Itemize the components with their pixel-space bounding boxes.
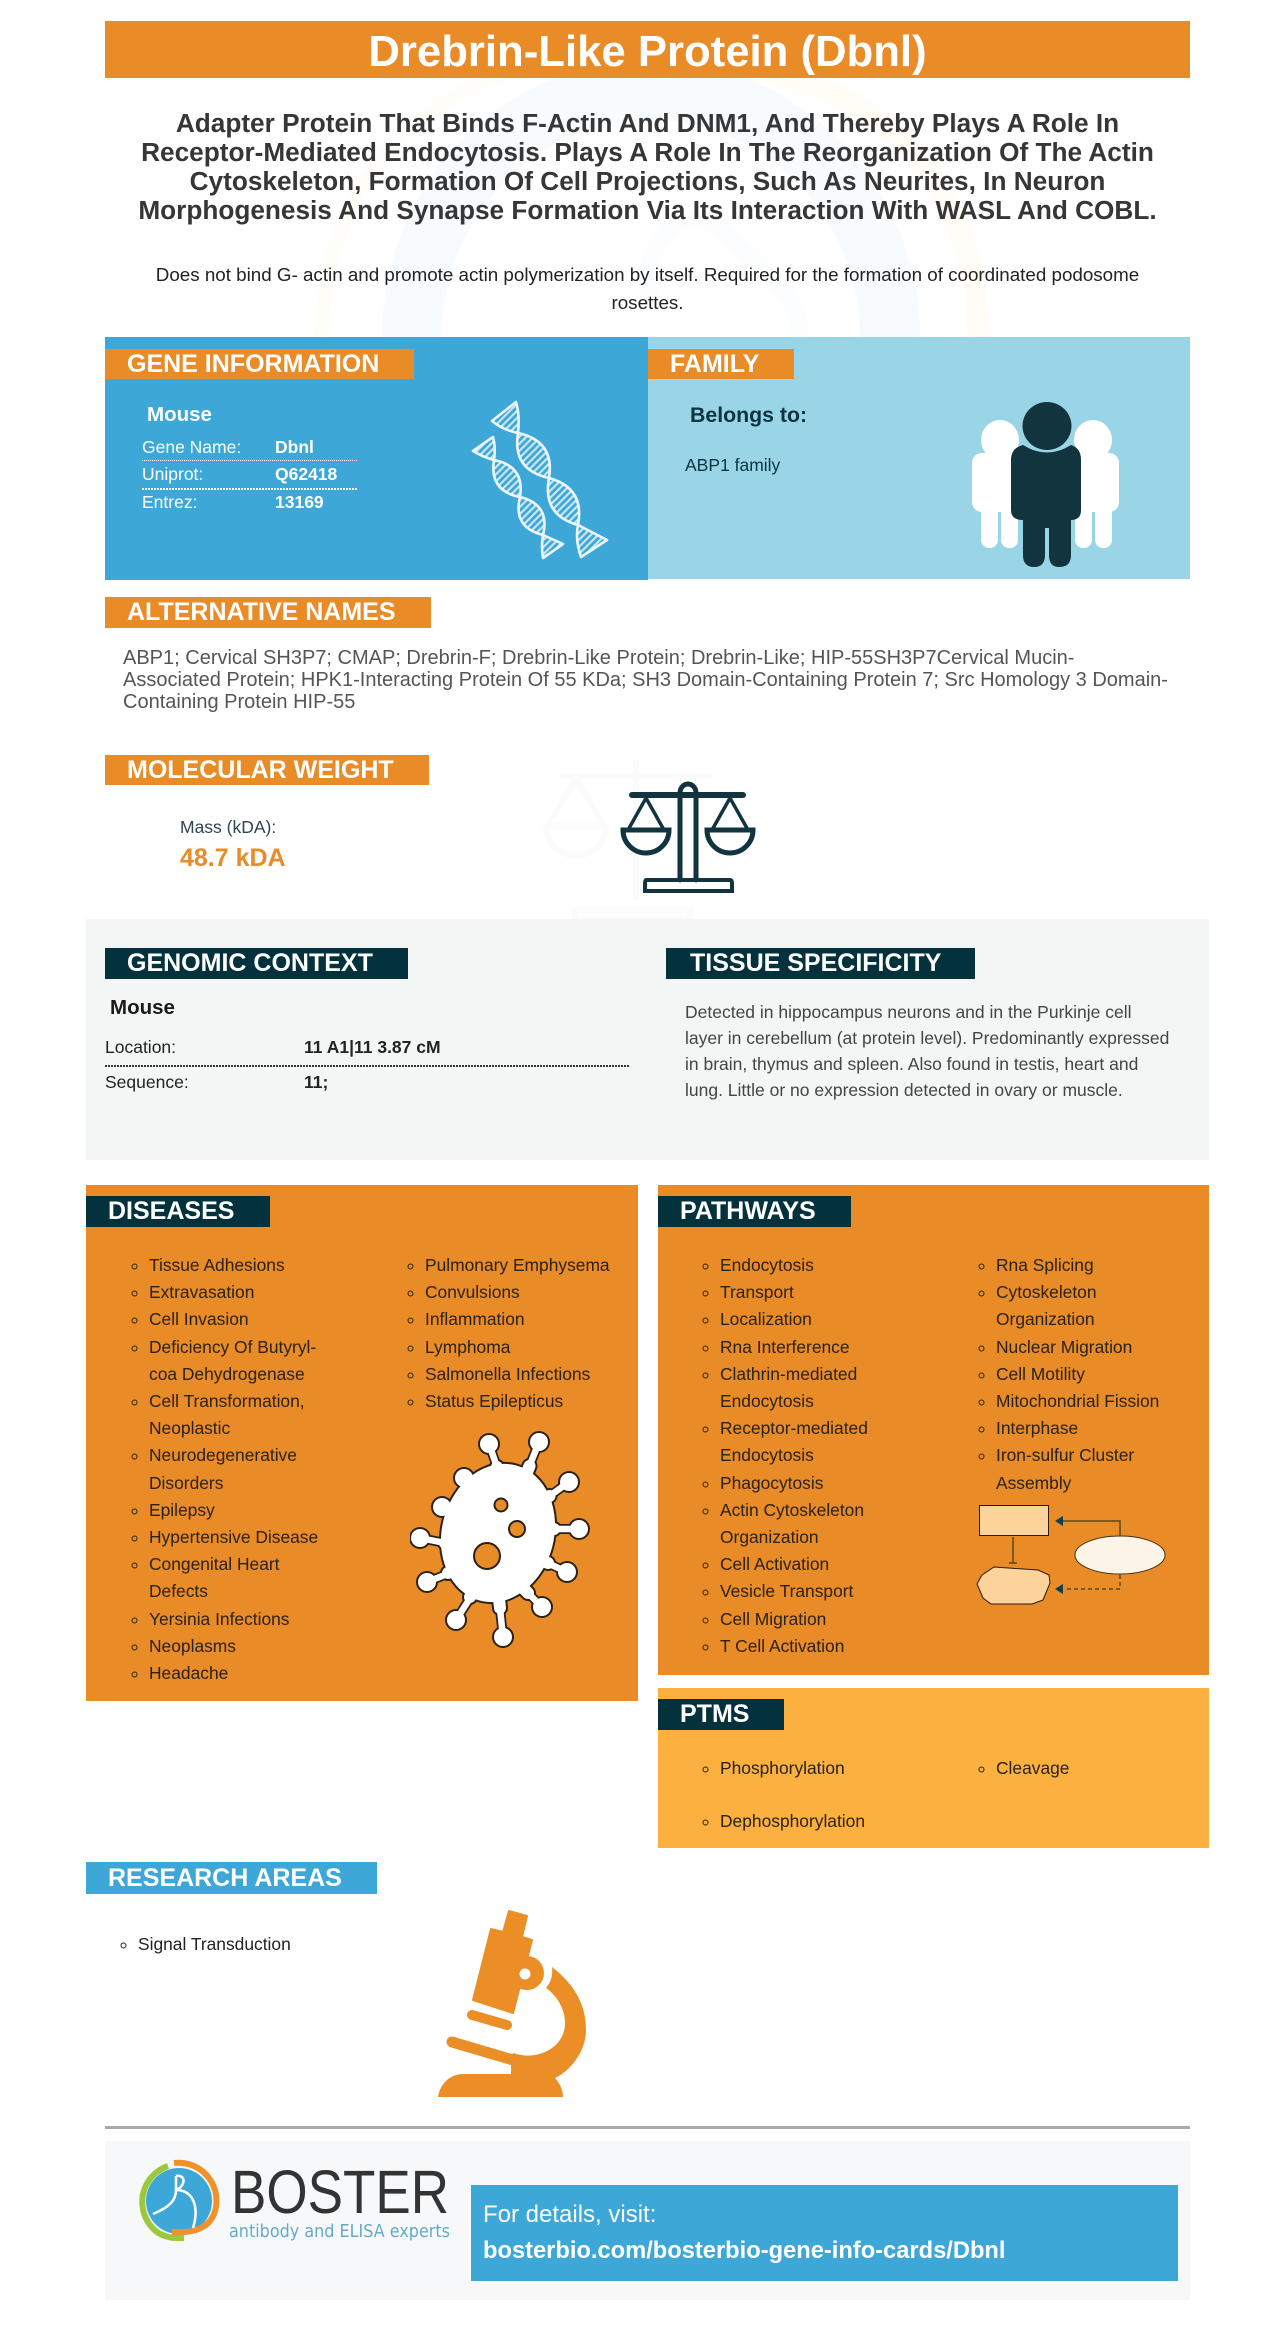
tissue specificity text: Detected in hippocampus neurons and in the Purkinje cell xyxy=(685,1002,1132,1022)
diseases list, right column: Salmonella Infections xyxy=(425,1364,590,1384)
alternative names text: Containing Protein HIP-55 xyxy=(123,691,355,713)
diseases list, left column: Extravasation xyxy=(149,1282,254,1302)
mass label: Mass (kDA): xyxy=(180,817,276,837)
heading: family: FAMILY xyxy=(670,350,759,378)
heading: alternative names: ALTERNATIVE NAMES xyxy=(127,598,396,626)
icon: three people xyxy=(972,402,1119,567)
panel: genomic context and tissue specificity xyxy=(86,919,1209,1160)
heading: PTMs xyxy=(658,1699,784,1730)
pathways list, left column: Rna Interference xyxy=(720,1337,850,1357)
background watermark logo xyxy=(746,78,989,337)
entrez row xyxy=(142,492,324,512)
diseases list, left column: Neurodegenerative xyxy=(149,1445,297,1465)
pathways list, right column: Cell Motility xyxy=(996,1364,1085,1384)
uniprot row: Uniprot: xyxy=(142,464,203,484)
icon: balance scale xyxy=(620,782,756,893)
diseases list, left column: Neoplastic xyxy=(149,1418,230,1438)
subtitle: protein function summary xyxy=(138,108,1157,224)
call to action box xyxy=(471,2185,1178,2281)
title banner xyxy=(105,21,1190,78)
diseases list, left column: Cell Transformation, xyxy=(149,1391,305,1411)
icon: flow diagram xyxy=(976,1505,1166,1604)
research areas list: Signal Transduction xyxy=(138,1934,291,1954)
uniprot row: Q62418 xyxy=(275,464,337,484)
diseases list, left column: Epilepsy xyxy=(149,1500,215,1520)
uniprot row xyxy=(142,464,337,484)
pathways list, right column: Rna Splicing xyxy=(996,1255,1094,1275)
diseases list, right column: Convulsions xyxy=(425,1282,520,1302)
PTM item: cleavage: Cleavage xyxy=(996,1758,1069,1778)
pathways list, right column: Organization xyxy=(996,1309,1095,1329)
heading: diseases xyxy=(86,1196,270,1227)
diseases list, right column: Pulmonary Emphysema xyxy=(425,1255,610,1275)
heading: genomic context: GENOMIC CONTEXT xyxy=(127,949,373,977)
pathways list, right column: Nuclear Migration xyxy=(996,1337,1132,1357)
diseases list, left column: Yersinia Infections xyxy=(149,1609,290,1629)
heading: PTMs: PTMS xyxy=(680,1700,749,1728)
URL: bosterbio.com/bosterbio-gene-info-cards/Dbnl xyxy=(483,2238,1005,2264)
diseases list, left column: Defects xyxy=(149,1581,208,1601)
diseases list, left column: Headache xyxy=(149,1663,228,1683)
pathways list, right column: Assembly xyxy=(996,1473,1071,1493)
tissue specificity text xyxy=(685,1002,1169,1100)
heading: gene information: GENE INFORMATION xyxy=(127,350,379,378)
panel: family xyxy=(648,337,1190,579)
diseases list, left column: Disorders xyxy=(149,1473,223,1493)
family name: ABP1 family xyxy=(685,455,780,475)
pathways list, left column: Phagocytosis xyxy=(720,1473,823,1493)
diseases list, right column: Inflammation xyxy=(425,1309,525,1329)
gene name row: Gene Name: xyxy=(142,437,241,457)
icon: microscope xyxy=(438,1910,586,2097)
subtitle: protein function summary: Cytoskeleton, Formation Of Cell Projections, Such As Neurites, In Neuron xyxy=(190,166,1105,196)
species label: Mouse xyxy=(147,403,212,426)
heading: pathways xyxy=(658,1196,851,1227)
diseases list, right column: Lymphoma xyxy=(425,1337,510,1357)
alternative names text xyxy=(123,647,1168,713)
pathways list, left column: T Cell Activation xyxy=(720,1636,844,1656)
PTM item: dephosphorylation: Dephosphorylation xyxy=(720,1810,865,1830)
tissue specificity text: layer in cerebellum (at protein level). Predominantly expressed xyxy=(685,1028,1169,1048)
diseases list, left column: Tissue Adhesions xyxy=(149,1255,285,1275)
heading: diseases: DISEASES xyxy=(108,1197,234,1225)
heading: tissue specificity: TISSUE SPECIFICITY xyxy=(690,949,941,977)
PTM item: phosphorylation: Phosphorylation xyxy=(720,1758,845,1778)
diseases list, left column: coa Dehydrogenase xyxy=(149,1364,305,1384)
diseases list, left column: Cell Invasion xyxy=(149,1309,249,1329)
gene name row: Dbnl xyxy=(275,437,314,457)
description paragraph xyxy=(156,264,1139,313)
logo: Boster: antibody and ELISA experts xyxy=(229,2222,450,2242)
pathways list, left column: Endocytosis xyxy=(720,1445,814,1465)
pathways list, left column: Vesicle Transport xyxy=(720,1581,853,1601)
panel: PTMs xyxy=(658,1688,1209,1848)
heading: molecular weight: MOLECULAR WEIGHT xyxy=(127,756,394,784)
subtitle: protein function summary: Adapter Protein That Binds F-Actin And DNM1, And Thereby Plays A Role In xyxy=(176,108,1119,138)
visit text: For details, visit: xyxy=(483,2201,656,2228)
entrez row: 13169 xyxy=(275,492,324,512)
location row: 11 A1|11 3.87 cM xyxy=(304,1037,441,1057)
panel: gene information xyxy=(105,337,648,580)
description paragraph: rosettes. xyxy=(611,292,684,313)
diseases list, left column xyxy=(132,1255,318,1683)
pathways list, left column: Endocytosis xyxy=(720,1391,814,1411)
subtitle: protein function summary: Receptor-Mediated Endocytosis. Plays A Role In The Reorganization Of The Actin xyxy=(141,136,1154,166)
description paragraph: Does not bind G- actin and promote actin polymerization by itself. Required for the formation of coordinated podosome xyxy=(156,264,1139,285)
panel: pathways xyxy=(658,1185,1209,1675)
subtitle: protein function summary: Morphogenesis And Synapse Formation Via Its Interaction With WASL And COBL. xyxy=(138,194,1157,224)
pathways list, left column: Organization xyxy=(720,1527,819,1547)
sequence row: 11; xyxy=(304,1072,328,1092)
pathways list, left column: Actin Cytoskeleton xyxy=(720,1500,864,1520)
sequence row xyxy=(105,1072,328,1092)
location row xyxy=(105,1037,441,1057)
icon: virus xyxy=(410,1431,590,1648)
pathways list, right column: Iron-sulfur Cluster xyxy=(996,1445,1134,1465)
pathways list, left column: Cell Activation xyxy=(720,1554,829,1574)
sequence row: Sequence: xyxy=(105,1072,189,1092)
entrez row: Entrez: xyxy=(142,492,197,512)
pathways list, left column: Receptor-mediated xyxy=(720,1418,868,1438)
pathways list, right column xyxy=(978,1255,1159,1493)
pathways list, left column: Localization xyxy=(720,1309,812,1329)
logo: Boster xyxy=(139,2158,450,2242)
alternative names text: ABP1; Cervical SH3P7; CMAP; Drebrin-F; Drebrin-Like Protein; Drebrin-Like; HIP-55SH3P7Cervical Mucin- xyxy=(123,647,1074,669)
diseases list, right column: Status Epilepticus xyxy=(425,1391,563,1411)
diseases list, left column: Hypertensive Disease xyxy=(149,1527,318,1547)
alternative names text: Associated Protein; HPK1-Interacting Protein Of 55 KDa; SH3 Domain-Containing Protein 7; Src Homology 3 Domain- xyxy=(123,669,1168,691)
location row: Location: xyxy=(105,1037,176,1057)
diseases list, left column: Neoplasms xyxy=(149,1636,236,1656)
gene name row xyxy=(142,437,314,457)
pathways list, right column: Interphase xyxy=(996,1418,1078,1438)
belongs to label: Belongs to: xyxy=(690,403,807,427)
heading: family xyxy=(648,349,794,379)
tissue specificity text: lung. Little or no expression detected in ovary or muscle. xyxy=(685,1080,1123,1100)
tissue specificity text: in brain, thymus and spleen. Also found in testis, heart and xyxy=(685,1054,1138,1074)
diseases list, left column: Congenital Heart xyxy=(149,1554,280,1574)
diseases list, right column xyxy=(408,1255,610,1411)
heading: pathways: PATHWAYS xyxy=(680,1197,816,1225)
pathways list, left column: Endocytosis xyxy=(720,1255,814,1275)
title banner: Drebrin-Like Protein (Dbnl) xyxy=(368,27,927,76)
pathways list, left column: Cell Migration xyxy=(720,1609,826,1629)
species label: Mouse xyxy=(110,996,175,1019)
diseases list, left column: Deficiency Of Butyryl- xyxy=(149,1337,316,1357)
pathways list, left column xyxy=(702,1255,868,1656)
heading: research areas: RESEARCH AREAS xyxy=(108,1864,342,1892)
pathways list, left column: Clathrin-mediated xyxy=(720,1364,857,1384)
pathways list, right column: Mitochondrial Fission xyxy=(996,1391,1159,1411)
panel: footer xyxy=(105,2141,1190,2300)
pathways list, left column: Transport xyxy=(720,1282,794,1302)
pathways list, right column: Cytoskeleton xyxy=(996,1282,1097,1302)
icon: DNA helix xyxy=(472,400,608,560)
mass value: 48.7 kDA xyxy=(180,844,286,872)
panel: diseases xyxy=(86,1185,638,1701)
